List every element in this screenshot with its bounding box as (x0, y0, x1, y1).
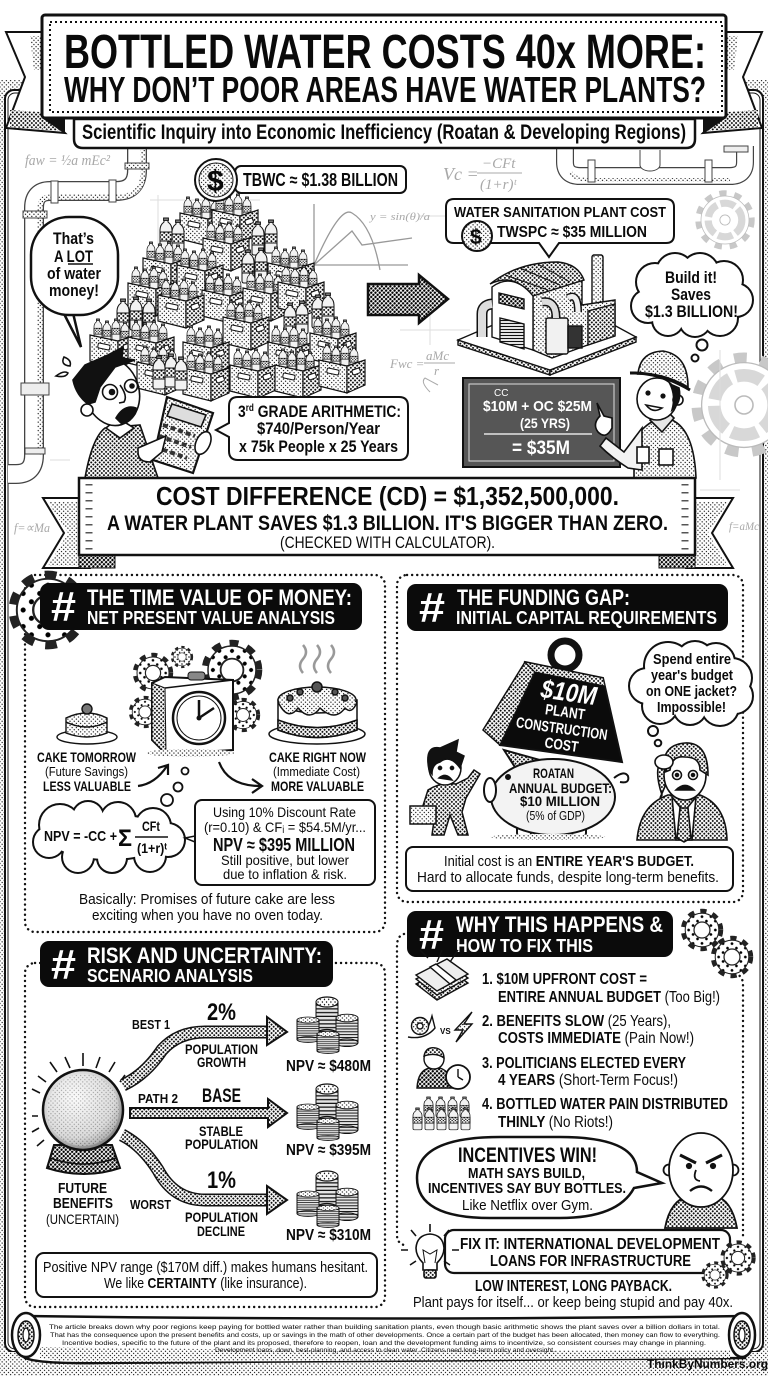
decorative gears (684, 912, 750, 975)
heading pill: # (419, 911, 444, 958)
thought cloud: jacket: Impossible! (657, 699, 726, 716)
thought cloud: build it: Saves (671, 285, 711, 304)
faint formula: f aw: faw = ½a mEc² (25, 153, 110, 169)
faint formula: y: y = sin(θ)/a (369, 212, 430, 223)
NPV result box: due to inflation & risk. (223, 866, 347, 882)
arithmetic note: $740/Person/Year (257, 419, 380, 438)
arithmetic note: rd (246, 403, 254, 414)
label: best: POPULATION (185, 1041, 258, 1057)
NPV result box: NPV ≈ $395 MILLION (213, 835, 355, 855)
TBWC label: TBWC ≈ $1.38 BILLION (243, 170, 398, 190)
heading pill: INITIAL CAPITAL REQUIREMENTS (456, 608, 717, 628)
label: best: 2% (207, 999, 236, 1026)
NPV formula cloud: Σ (118, 825, 132, 852)
decorative corner gear (14, 576, 82, 644)
cost difference banner: (CHECKED WITH CALCULATOR). (280, 533, 495, 552)
label: cake right now: CAKE RIGHT NOW (269, 749, 367, 765)
footer fine print: Development loans, down, best-planning, and access to clean water. Citizens need long-term policy and oversight. (215, 1347, 555, 1354)
thought cloud: build it: $1.3 BILLION! (645, 302, 738, 321)
budget callout: Initial cost is an ENTIRE YEAR'S BUDGET. (444, 853, 694, 870)
panel: risk and uncertainty (25, 941, 385, 1307)
speech bubble: lot of money: money! (49, 281, 99, 300)
cost difference banner: A WATER PLANT SAVES $1.3 BILLION. IT'S BIGGER THAN ZERO. (107, 512, 668, 535)
big cake (269, 645, 365, 744)
item 3 (482, 1055, 686, 1089)
TBWC label (195, 159, 406, 201)
water plant illustration (458, 255, 636, 375)
fix it text: LOW INTEREST, LONG PAYBACK. (475, 1278, 672, 1295)
fix it box: LOANS FOR INFRASTRUCTURE (490, 1253, 691, 1270)
item 1 (482, 971, 720, 1006)
ten million weight: CONSTRUCTION (515, 714, 608, 744)
label: future benefits: (UNCERTAIN) (46, 1211, 119, 1227)
label: worst: WORST (130, 1197, 171, 1212)
small cake (57, 704, 117, 744)
budget label: $10 MILLION (520, 793, 600, 809)
footer scroll (0, 1313, 768, 1376)
label: best: BEST 1 (132, 1017, 170, 1032)
chalkboard: = $35M (512, 438, 570, 459)
speech bubble: incentives win: INCENTIVES WIN! (458, 1144, 597, 1167)
ten million weight: COST (543, 734, 579, 756)
risk callout: We like CERTAINTY (like insurance). (104, 1275, 307, 1292)
label: cake tomorrow: LESS VALUABLE (43, 778, 131, 794)
label: best (132, 999, 258, 1070)
chalkboard: (25 YRS) (520, 415, 570, 431)
arithmetic note (216, 397, 408, 460)
thought cloud: jacket: Spend entire (653, 651, 731, 668)
heading pill: THE TIME VALUE OF MONEY: (87, 585, 352, 610)
item 1: ENTIRE ANNUAL BUDGET (Too Big!) (498, 989, 720, 1006)
cost difference banner: COST DIFFERENCE (CD) = $1,352,500,000. (156, 481, 619, 511)
label: cake right now (269, 749, 367, 794)
plant cost label: WATER SANITATION PLANT COST (454, 204, 666, 221)
heading pill: # (51, 583, 76, 630)
heading pill: RISK AND UNCERTAINTY: (87, 943, 322, 968)
speech bubble: incentives win: Like Netflix over Gym. (462, 1197, 593, 1214)
risk callout (36, 1253, 377, 1297)
value: base: NPV ≈ $395M (286, 1142, 371, 1159)
worried man with calculator (56, 347, 214, 478)
coins: best (297, 997, 358, 1054)
label: best: GROWTH (197, 1054, 246, 1070)
angry bald man (664, 1133, 738, 1228)
label: future benefits: BENEFITS (53, 1195, 113, 1212)
arithmetic note: 3 (238, 402, 247, 421)
item 4 (482, 1096, 728, 1131)
panel: why this happens (397, 911, 753, 1311)
ten million weight: PLANT (544, 701, 586, 724)
item 4: THINLY (No Riots!) (498, 1114, 613, 1131)
bottle pile (90, 194, 365, 401)
footer fine print (49, 1324, 720, 1354)
NPV formula cloud: (1+r)ᵗ (137, 840, 167, 856)
clock and gears (131, 644, 258, 757)
faint formula: Fwc (389, 348, 455, 378)
heading pill: NET PRESENT VALUE ANALYSIS (87, 608, 335, 628)
faint formula: left margin: f=∝Ma (14, 520, 50, 535)
arrow: worst scenario (122, 1135, 287, 1214)
chalkboard (463, 378, 620, 467)
speech bubble: incentives win: MATH SAYS BUILD, (468, 1165, 585, 1182)
value: best: NPV ≈ $480M (286, 1058, 371, 1075)
panel: funding gap (397, 575, 752, 902)
coins: base (297, 1084, 358, 1140)
icon: snail vs lightning (408, 1012, 472, 1042)
plant cost label (446, 199, 674, 257)
budget label: (5% of GDP) (526, 808, 585, 823)
label: base: POPULATION (185, 1136, 258, 1152)
NPV result box (185, 800, 375, 885)
faint formula: Fwc: aMc (426, 348, 449, 363)
label: base: STABLE (199, 1123, 243, 1139)
takeaway text: Basically: Promises of future cake are less (79, 891, 335, 908)
icon: snail vs lightning: VS (440, 1027, 451, 1036)
label: base (138, 1086, 258, 1152)
fix it box: FIX IT: INTERNATIONAL DEVELOPMENT (460, 1236, 720, 1253)
fix it box (445, 1230, 730, 1273)
arithmetic note: x 75k People x 25 Years (239, 437, 398, 456)
item 3: 4 YEARS (Short-Term Focus!) (498, 1072, 678, 1089)
speech bubble: lot of money: of water (47, 264, 101, 283)
icon: light bulb (401, 1224, 459, 1278)
arrow: clock to now (219, 762, 262, 793)
label: worst: 1% (207, 1167, 236, 1194)
label: cake tomorrow: (Future Savings) (45, 764, 128, 779)
heading pill: # (51, 941, 76, 988)
footer fine print: The article breaks down why poor regions keep paying for bottled water rather than building sanitation plants, even though basic arithmetic shows the plant saves over a billion dollars in total. (49, 1324, 720, 1331)
small worried man (410, 740, 480, 835)
budget label: ROATAN (533, 765, 574, 781)
item 2: COSTS IMMEDIATE (Pain Now!) (498, 1030, 694, 1047)
arrow: base scenario (130, 1099, 287, 1127)
engineer (595, 351, 696, 478)
item 2 (482, 1013, 694, 1047)
item 3: 3. POLITICIANS ELECTED EVERY (482, 1055, 686, 1072)
value: worst: NPV ≈ $310M (286, 1227, 371, 1244)
icon: bottles (413, 1097, 470, 1130)
NPV formula cloud (34, 768, 188, 872)
heading pill (407, 911, 673, 958)
faint formula: Fwc: r (434, 363, 440, 378)
coins: worst (297, 1171, 358, 1228)
speech bubble: lot of money: That’s (53, 229, 94, 248)
NPV result box: (r=0.10) & CFᵢ = $54.5M/yr... (204, 819, 366, 835)
faint formula: Vc (443, 156, 522, 193)
plant cost label: $ (470, 226, 482, 249)
thought cloud: jacket (630, 642, 752, 746)
footer fine print: That has the consequence upon the present benefits and costs, up or savings in the math of other developments. Once a certain part of the budget has been allocated, then money can flow to everything. (50, 1332, 720, 1339)
thought cloud: jacket: on ONE jacket? (646, 683, 737, 700)
speech bubble: lot of money: A LOT (54, 247, 93, 266)
item 2: 2. BENEFITS SLOW (25 Years), (482, 1013, 671, 1030)
chalkboard: CC (494, 388, 508, 399)
heading pill: WHY THIS HAPPENS & (456, 912, 663, 937)
ten million weight (483, 641, 622, 762)
heading pill (407, 584, 728, 631)
label: cake right now: MORE VALUABLE (271, 778, 364, 794)
faint formula: Fwc: Fwc = (389, 356, 424, 371)
big arrow (368, 275, 448, 323)
heading pill: # (419, 584, 445, 631)
plant cost label: TWSPC ≈ $35 MILLION (497, 224, 647, 241)
decorative gears at fix box (703, 1243, 753, 1287)
heading pill: THE FUNDING GAP: (457, 585, 630, 610)
icon: money stack (416, 950, 468, 1000)
faint formula: right margin: f=aMc (729, 519, 760, 533)
risk callout: Positive NPV range ($170M diff.) makes humans hesitant. (43, 1259, 368, 1276)
watermark: ThinkByNumbers.org (647, 1357, 768, 1371)
takeaway text (79, 891, 335, 924)
arithmetic note: GRADE ARITHMETIC: (254, 402, 401, 421)
NPV result box: Using 10% Discount Rate (213, 804, 356, 820)
budget callout: Hard to allocate funds, despite long-term benefits. (417, 869, 719, 886)
chalkboard: $10M + OC $25M (483, 398, 592, 415)
footer fine print: Incentive bodies, specific to the future of the plant and its proposed, therefore to reopen, loan and the development funding aims to incentivize, so consistent courses may change in planning. (62, 1340, 706, 1347)
title banner (6, 15, 762, 134)
heading pill: HOW TO FIX THIS (456, 936, 593, 956)
speech bubble: incentives win: INCENTIVES SAY BUY BOTTLES. (428, 1180, 626, 1197)
label: worst: DECLINE (197, 1223, 245, 1239)
crystal ball (32, 1053, 125, 1174)
NPV formula cloud: CFt (142, 818, 160, 834)
stressed official (637, 743, 727, 842)
item 1: 1. $10M UPFRONT COST = (482, 971, 647, 988)
thought cloud: build it: Build it! (665, 268, 717, 287)
piggy bank (484, 750, 628, 840)
panel: time value of money (14, 575, 385, 932)
faint formula: Vc: −CFt (482, 156, 516, 172)
label: future benefits: FUTURE (58, 1180, 107, 1197)
label: base: BASE (202, 1086, 241, 1107)
label: base: PATH 2 (138, 1091, 178, 1106)
speech bubble: lot of money (31, 217, 118, 347)
fix it text (413, 1278, 733, 1311)
heading pill: SCENARIO ANALYSIS (87, 966, 253, 986)
heading pill (40, 583, 362, 630)
speech bubble: incentives win (417, 1137, 662, 1218)
heading pill (40, 941, 333, 988)
label: worst (130, 1167, 258, 1239)
label: future benefits (46, 1180, 119, 1227)
arrow: best scenario (123, 1017, 287, 1085)
takeaway text: exciting when you have no oven today. (92, 907, 323, 924)
budget callout (406, 847, 733, 891)
budget label (509, 765, 612, 823)
arrow: tomorrow to clock (138, 765, 168, 786)
label: cake tomorrow (37, 749, 137, 794)
thought cloud: build it (632, 254, 752, 362)
NPV result box: Still positive, but lower (221, 852, 349, 868)
label: cake tomorrow: CAKE TOMORROW (37, 749, 137, 765)
budget label: ANNUAL BUDGET: (509, 780, 612, 796)
faint formula: Vc: (1+r)ᵗ (480, 177, 517, 193)
icon: politician and clock (417, 1048, 470, 1089)
label: cake right now: (Immediate Cost) (273, 764, 360, 779)
faint formula: Vc: Vc = (443, 164, 479, 184)
TBWC label: $ (207, 165, 224, 198)
label: worst: POPULATION (185, 1209, 258, 1225)
ten million weight: $10M (538, 673, 600, 711)
thought cloud: jacket: year's budget (651, 667, 733, 684)
cost difference banner (43, 478, 733, 568)
decorative pipes and sketches (8, 146, 768, 490)
NPV formula cloud: NPV = -CC + (44, 828, 117, 845)
